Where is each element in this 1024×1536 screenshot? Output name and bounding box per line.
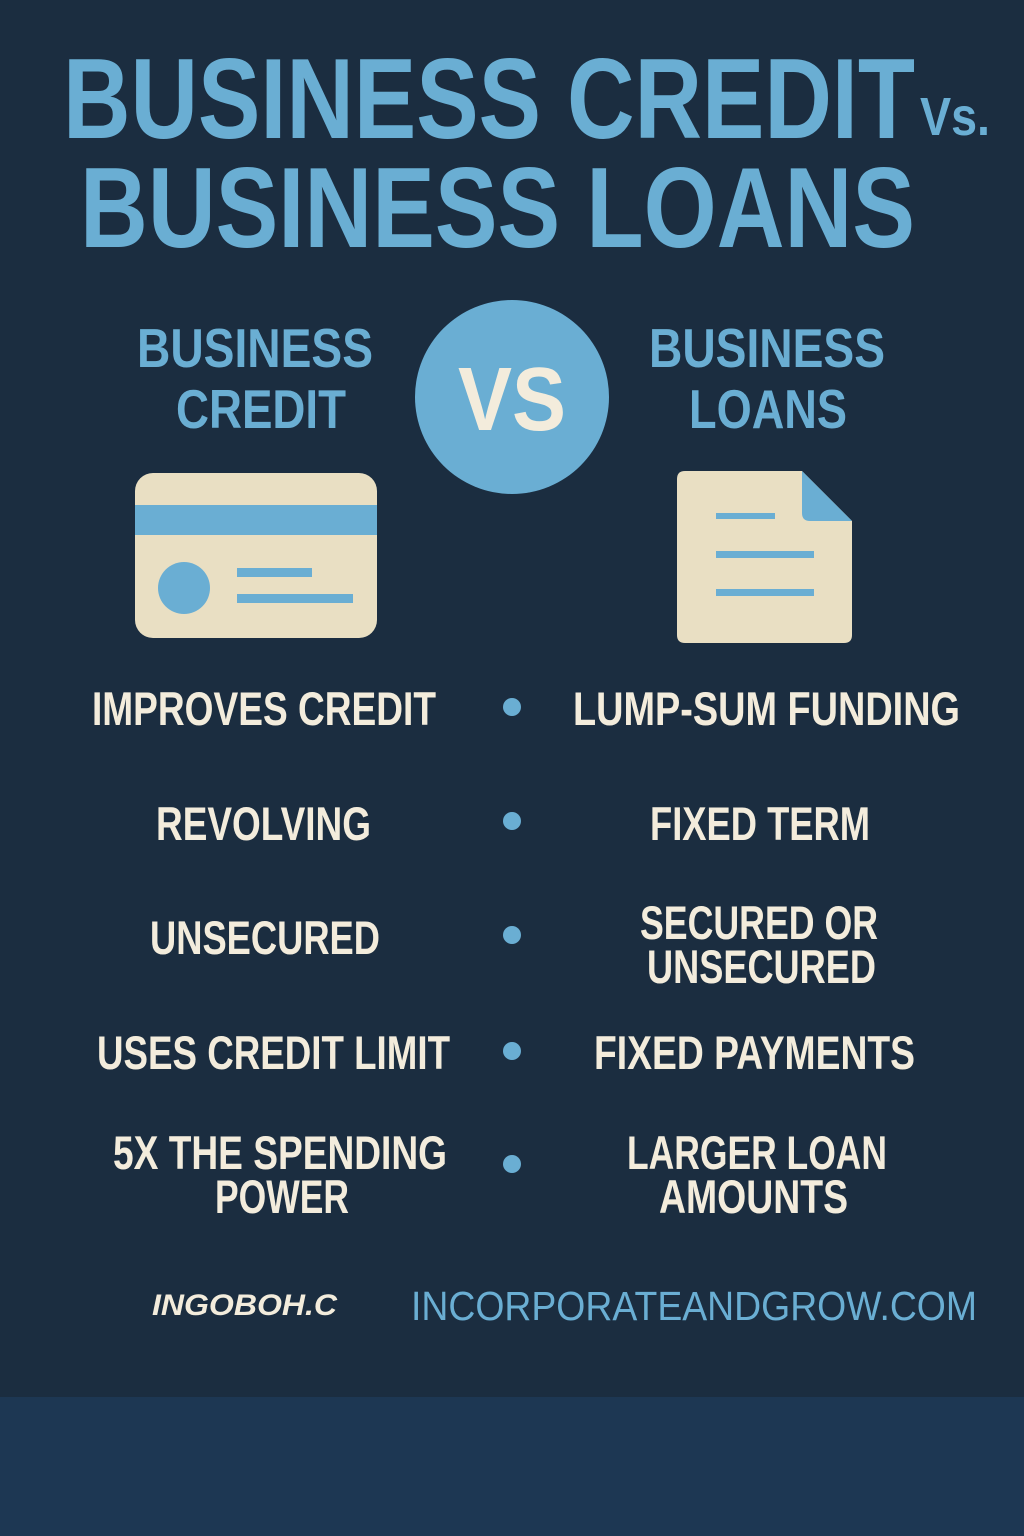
row 2 (156, 797, 870, 850)
heading: business credit: CREDIT (176, 378, 346, 440)
footer url: INCORPORATEANDGROW.COM (411, 1283, 977, 1329)
row 2: FIXED TERM (650, 797, 870, 850)
comparison rows (92, 682, 960, 1223)
icon: loan document (677, 471, 852, 643)
row 3: SECURED OR (640, 896, 878, 949)
row 4: USES CREDIT LIMIT (97, 1026, 450, 1079)
heading: business loans: LOANS (689, 378, 847, 440)
title: Vs. (920, 87, 990, 147)
row 5: POWER (215, 1170, 349, 1223)
row 3: UNSECURED (150, 911, 380, 964)
row 1 (92, 682, 960, 735)
heading: business loans (649, 317, 885, 440)
row 5: 5X THE SPENDING (113, 1126, 447, 1179)
row 4 (97, 1026, 915, 1079)
row 2: REVOLVING (156, 797, 371, 850)
row 3 (150, 896, 878, 993)
VS badge (415, 300, 609, 494)
VS badge: VS (458, 350, 566, 450)
heading: business loans: BUSINESS (649, 317, 885, 379)
row 5 (113, 1126, 887, 1223)
row 5: AMOUNTS (659, 1170, 848, 1223)
heading: business credit: BUSINESS (137, 317, 373, 379)
icon: credit card (135, 473, 377, 638)
row 5: LARGER LOAN (627, 1126, 887, 1179)
heading: business credit (137, 317, 373, 440)
row 3: UNSECURED (647, 940, 876, 993)
row 1: IMPROVES CREDIT (92, 682, 436, 735)
title (63, 36, 990, 272)
footer logo: INGOBOH.C (152, 1289, 338, 1322)
row 4: FIXED PAYMENTS (594, 1026, 915, 1079)
